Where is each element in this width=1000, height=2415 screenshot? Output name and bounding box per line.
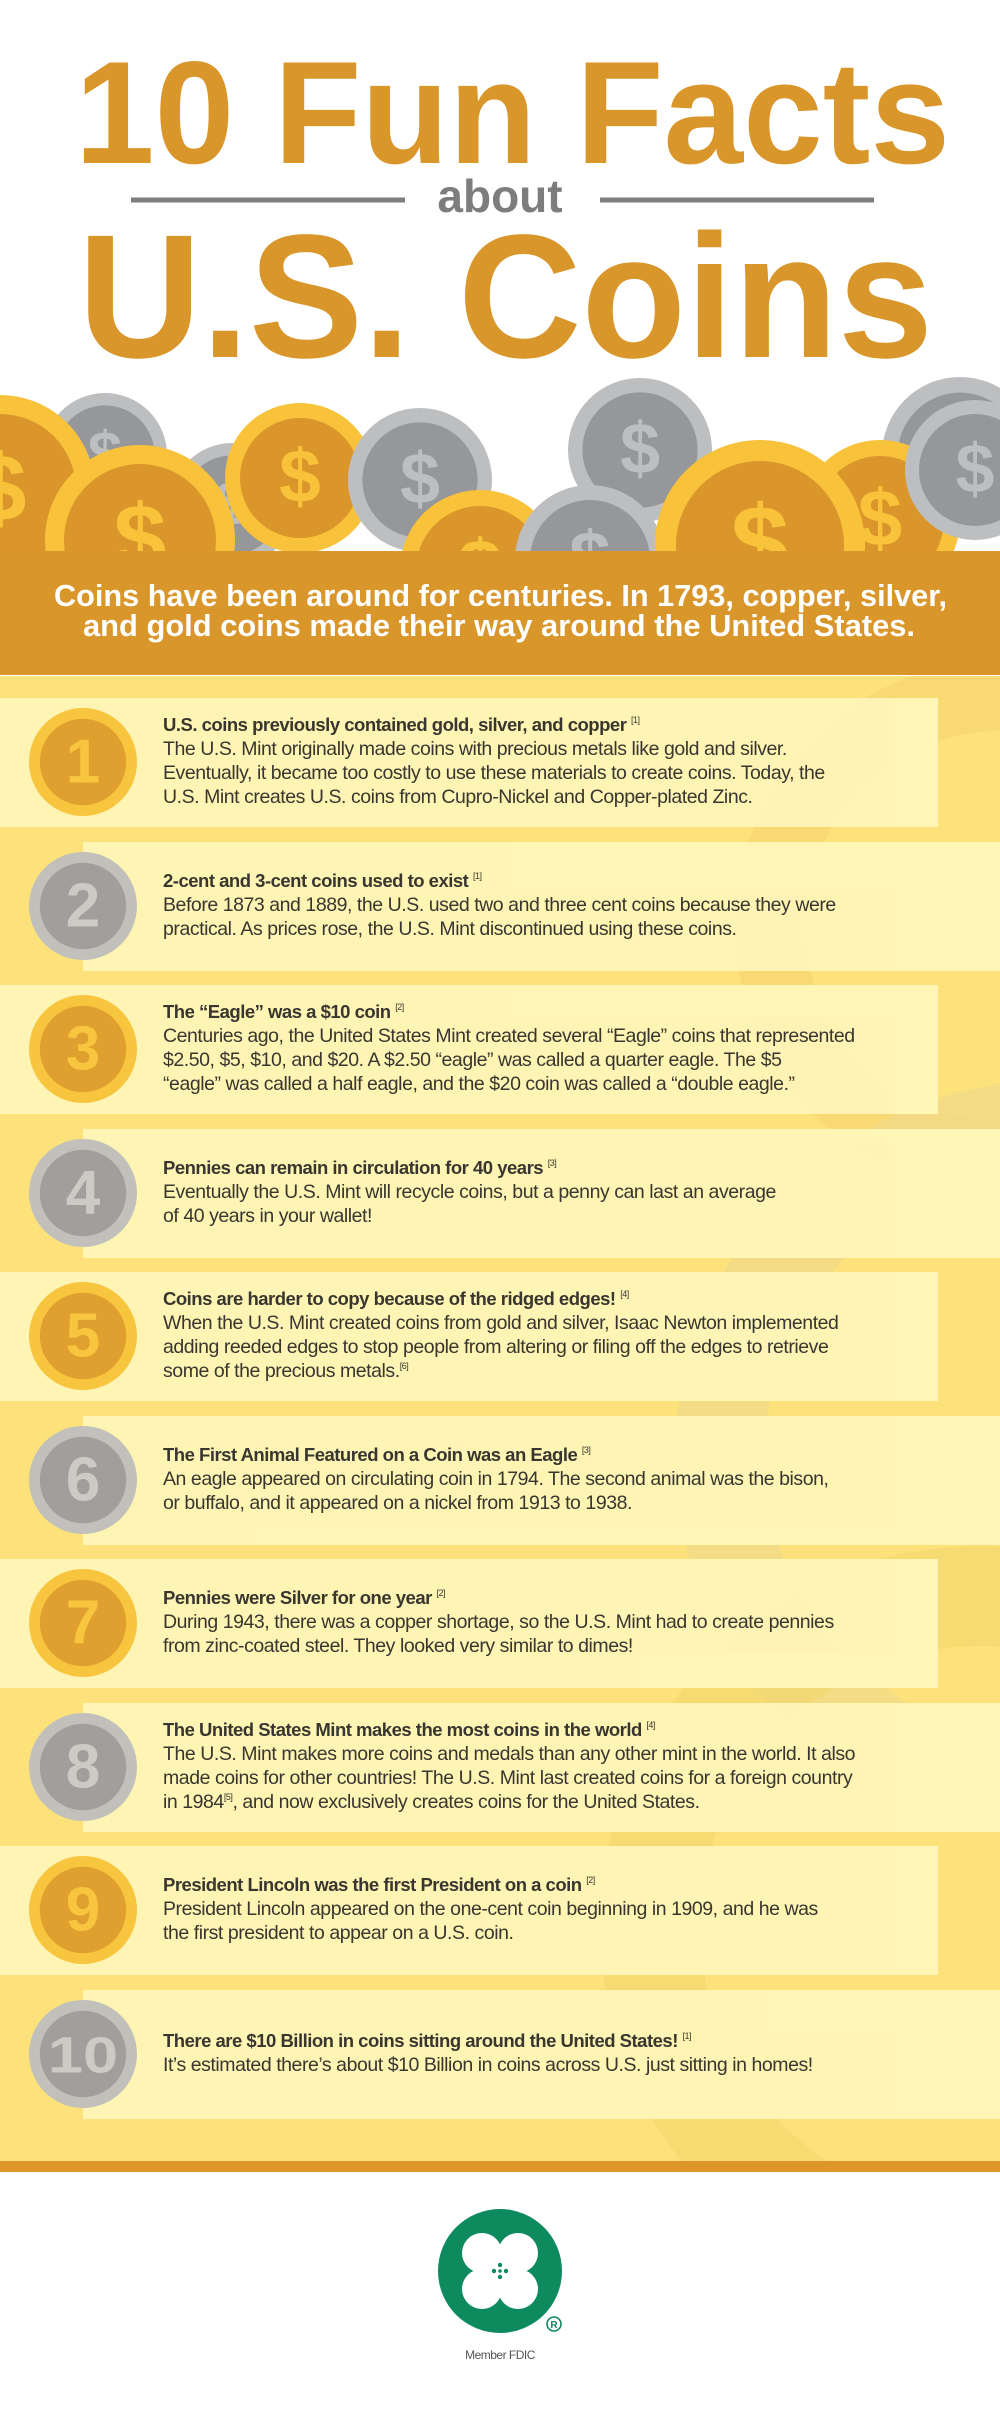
text: fact 5: When the U.S. Mint created coins from gold and silver, Isaac Newton implemented <box>163 1312 838 1334</box>
text: fact 8 <box>163 1719 855 1813</box>
icon: coin 2 <box>29 852 137 960</box>
intro banner: Coins have been around for centuries. In 1793, copper, silver, <box>54 578 947 613</box>
fact 2 <box>83 842 1000 971</box>
title: about <box>437 170 563 222</box>
fact 10 <box>83 1990 1000 2119</box>
text: fact 7: During 1943, there was a copper shortage, so the U.S. Mint had to create pennies <box>163 1611 834 1633</box>
icon: coin 1 <box>29 708 137 816</box>
fact 9 <box>0 1846 938 1975</box>
text: fact 1: The U.S. Mint originally made coins with precious metals like gold and silver. <box>163 738 787 760</box>
coin pile illustration <box>0 377 1000 551</box>
text: fact 4: Pennies can remain in circulation for 40 years [3] <box>163 1157 556 1178</box>
fact 5 <box>0 1272 938 1401</box>
text: fact 6: An eagle appeared on circulating coin in 1794. The second animal was the bison, <box>163 1468 828 1490</box>
text: fact 2: practical. As prices rose, the U.S. Mint discontinued using these coins. <box>163 918 736 940</box>
text: fact 10: It’s estimated there’s about $10 Billion in coins across U.S. just sitting in homes! <box>163 2054 813 2076</box>
text: fact 9: President Lincoln was the first President on a coin [2] <box>163 1874 595 1895</box>
fact 7 <box>0 1559 938 1688</box>
text: fact 1 <box>163 714 825 808</box>
text: fact 7: Pennies were Silver for one year [2] <box>163 1587 445 1608</box>
text: fact 2 <box>163 870 836 940</box>
icon: coin 5: 5 <box>66 1302 100 1371</box>
text: fact 8: The U.S. Mint makes more coins and medals than any other mint in the world. It also <box>163 1743 855 1765</box>
title <box>75 40 950 370</box>
text: fact 9 <box>163 1874 818 1944</box>
icon: coin 5 <box>29 1282 137 1390</box>
text: fact 9: President Lincoln appeared on the one-cent coin beginning in 1909, and he was <box>163 1898 818 1920</box>
icon: coin 4 <box>29 1139 137 1247</box>
text: fact 1: U.S. Mint creates U.S. coins from Cupro-Nickel and Copper-plated Zinc. <box>163 786 752 808</box>
text: fact 3: Centuries ago, the United States Mint created several “Eagle” coins that represented <box>163 1025 855 1047</box>
fact 1 <box>0 698 938 827</box>
logo: FDIC member <box>438 2209 562 2362</box>
fact 8 <box>83 1703 1000 1832</box>
icon: coin 6 <box>29 1426 137 1534</box>
text: fact 10: There are $10 Billion in coins sitting around the United States! [1] <box>163 2030 691 2051</box>
text: fact 1: U.S. coins previously contained gold, silver, and copper [1] <box>163 714 640 735</box>
text: fact 6: The First Animal Featured on a Coin was an Eagle [3] <box>163 1444 590 1465</box>
text: fact 7: from zinc-coated steel. They looked very similar to dimes! <box>163 1635 633 1657</box>
icon: coin 7: 7 <box>66 1589 100 1658</box>
text: fact 2: Before 1873 and 1889, the U.S. used two and three cent coins because they were <box>163 894 836 916</box>
icon: coin 9: 9 <box>66 1876 100 1945</box>
facts background <box>0 676 1000 2161</box>
intro banner: and gold coins made their way around the United States. <box>83 608 915 643</box>
text: fact 2: 2-cent and 3-cent coins used to exist [1] <box>163 870 482 891</box>
text: fact 4 <box>163 1157 776 1227</box>
fact 4 <box>83 1129 1000 1258</box>
text: fact 5: some of the precious metals.[6] <box>163 1360 408 1382</box>
text: fact 3 <box>163 1001 855 1095</box>
icon: coin 8 <box>29 1713 137 1821</box>
text: fact 7 <box>163 1587 834 1657</box>
text: fact 8: The United States Mint makes the most coins in the world [4] <box>163 1719 655 1740</box>
fact 3 <box>0 985 938 1114</box>
text: fact 6 <box>163 1444 828 1514</box>
icon: coin 7 <box>29 1569 137 1677</box>
intro banner <box>0 551 1000 675</box>
fact 6 <box>83 1416 1000 1545</box>
text: fact 4: of 40 years in your wallet! <box>163 1205 372 1227</box>
icon: coin 4: 4 <box>66 1159 101 1228</box>
text: fact 6: or buffalo, and it appeared on a nickel from 1913 to 1938. <box>163 1492 632 1514</box>
text: fact 3: $2.50, $5, $10, and $20. A $2.50 “eagle” was called a quarter eagle. The $5 <box>163 1049 782 1071</box>
text: fact 5: Coins are harder to copy because of the ridged edges! [4] <box>163 1288 629 1309</box>
icon: coin 10 <box>29 2000 137 2108</box>
icon: coin 6: 6 <box>66 1446 100 1515</box>
logo: FDIC member: R <box>550 2320 558 2331</box>
logo: FDIC member: Member FDIC <box>465 2348 535 2362</box>
text: fact 10 <box>163 2030 813 2076</box>
bottom stripe <box>0 2161 1000 2172</box>
text: fact 3: “eagle” was called a half eagle, and the $20 coin was called a “double eagle.” <box>163 1073 795 1095</box>
icon: coin 3 <box>29 995 137 1103</box>
text: fact 5 <box>163 1288 838 1382</box>
text: fact 5: adding reeded edges to stop people from altering or filing off the edges to retrieve <box>163 1336 828 1358</box>
text: fact 3: The “Eagle” was a $10 coin [2] <box>163 1001 404 1022</box>
text: fact 1: Eventually, it became too costly to use these materials to create coins. Today, the <box>163 762 825 784</box>
icon: coin 3: 3 <box>66 1015 100 1084</box>
text: fact 9: the first president to appear on a U.S. coin. <box>163 1922 513 1944</box>
icon: coin 1: 1 <box>66 728 100 797</box>
text: fact 8: in 1984[5], and now exclusively creates coins for the United States. <box>163 1791 700 1813</box>
icon: coin 8: 8 <box>66 1733 100 1802</box>
icon: coin 2: 2 <box>66 872 100 941</box>
text: fact 8: made coins for other countries! The U.S. Mint last created coins for a foreign country <box>163 1767 852 1789</box>
text: fact 4: Eventually the U.S. Mint will recycle coins, but a penny can last an average <box>163 1181 776 1203</box>
icon: coin 9 <box>29 1856 137 1964</box>
